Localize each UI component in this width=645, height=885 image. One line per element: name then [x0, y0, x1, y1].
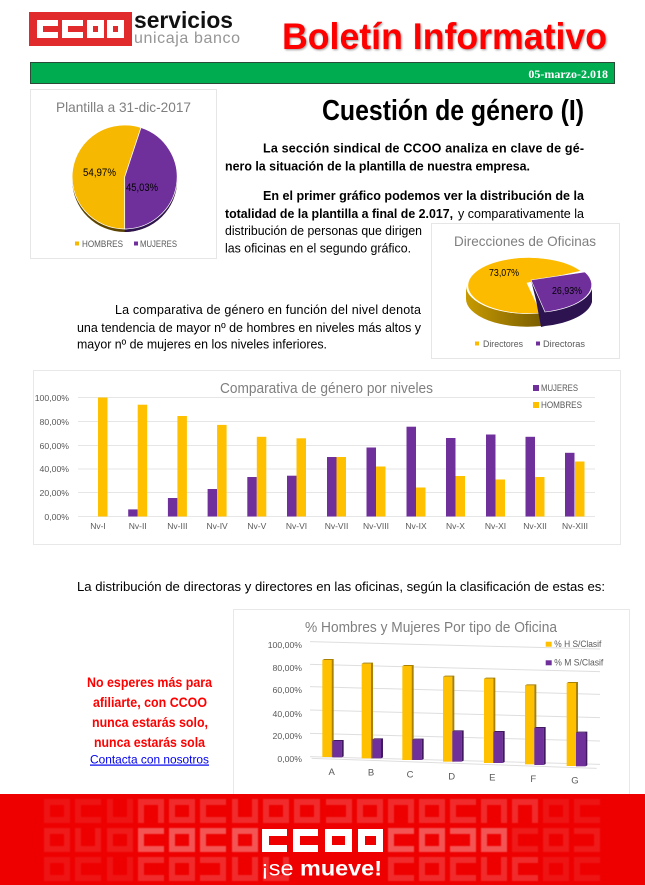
footer banner — [0, 794, 645, 885]
legend — [546, 639, 604, 668]
panel: pie chart Plantilla a 31-dic-2017: 54,97% — [83, 167, 116, 179]
panel: 3D pie chart Direcciones de Oficinas: Direcciones de Oficinas — [454, 233, 596, 249]
axis labels: 20,00% — [273, 731, 302, 741]
title: Boletín Informativo: Boletín Informativo — [282, 16, 607, 57]
category labels: E — [489, 773, 495, 784]
text block: second paragraph: y comparativamente la — [458, 207, 584, 221]
category labels: Nv-XII — [523, 521, 547, 531]
callout: afiliación: No esperes más para — [87, 675, 212, 690]
panel: 3D pie chart Direcciones de Oficinas: Directoras — [543, 339, 586, 349]
axis labels: 80,00% — [273, 663, 302, 673]
callout: afiliación: nunca estarás solo, — [92, 715, 208, 730]
text block: intro paragraph — [225, 142, 584, 174]
text block: comparativa de género — [77, 303, 422, 352]
text block: second paragraph — [225, 189, 585, 256]
axis labels: 40,00% — [40, 464, 69, 474]
panel: 3D pie chart Direcciones de Oficinas: 26,93% — [552, 285, 582, 297]
axis labels: 100,00% — [35, 393, 69, 403]
panel: pie chart Plantilla a 31-dic-2017 — [30, 90, 216, 258]
category labels: Nv-XIII — [562, 521, 588, 531]
category labels: A — [329, 767, 336, 778]
panel: bar chart Comparativa de género por niveles: Comparativa de género por niveles — [220, 381, 433, 397]
category labels: Nv-IV — [206, 521, 228, 531]
bars: mujeres — [128, 427, 574, 516]
category labels — [329, 767, 579, 786]
category labels: Nv-II — [129, 521, 147, 531]
panel: pie chart Plantilla a 31-dic-2017: 45,03% — [126, 182, 158, 194]
category labels: Nv-XI — [485, 521, 506, 531]
text block: second paragraph: En el primer gráfico podemos ver la distribución de la — [263, 189, 585, 203]
category labels: Nv-X — [446, 521, 465, 531]
text block: comparativa de género: La comparativa de género en función del nivel denota — [115, 303, 421, 317]
category labels: G — [571, 775, 579, 786]
logo: CCOO servicios unicaja banco: servicios — [134, 7, 233, 33]
legend: HOMBRES — [541, 400, 582, 410]
category labels: Nv-IX — [405, 521, 427, 531]
axis labels — [268, 640, 302, 764]
callout: afiliación: Contacta con nosotros — [90, 752, 209, 766]
axis labels: 0,00% — [277, 754, 302, 764]
axis labels: 80,00% — [40, 417, 69, 427]
panel: pie chart Plantilla a 31-dic-2017: MUJERES — [140, 239, 177, 249]
axis labels: 60,00% — [273, 685, 302, 695]
logo: CCOO servicios unicaja banco — [29, 7, 240, 47]
panel: bar chart Comparativa de género por niveles — [34, 370, 620, 544]
axis labels: 60,00% — [40, 441, 69, 451]
callout: afiliación: afiliarte, con CCOO — [93, 695, 207, 710]
logo: CCOO white — [266, 832, 380, 848]
bars and gridlines — [310, 642, 600, 768]
panel: 3D bar chart Hombres y Mujeres por tipo de oficina — [234, 610, 630, 800]
heading: Cuestión de género (I): Cuestión de género (I) — [322, 95, 584, 127]
text block: second paragraph: las oficinas en el segundo gráfico. — [225, 242, 411, 256]
slogan: ¡se mueve! — [261, 858, 382, 880]
category labels: Nv-III — [167, 521, 188, 531]
text block: intro paragraph: La sección sindical de CCOO analiza en clave de gé- — [263, 142, 584, 156]
axis labels: 0,00% — [44, 512, 69, 522]
panel: pie chart Plantilla a 31-dic-2017: HOMBRES — [82, 239, 123, 249]
axis labels: 40,00% — [273, 709, 302, 719]
panel: 3D pie chart Direcciones de Oficinas: Directores — [483, 339, 523, 349]
axis labels: 20,00% — [40, 488, 69, 498]
text block: intro paragraph: nero la situación de la plantilla de nuestra empresa. — [225, 160, 530, 174]
category labels: C — [407, 770, 414, 781]
category labels: Nv-VIII — [363, 521, 389, 531]
text block: distribución de directoras: La distribución de directoras y directores en las oficinas, según la clasificación de estas es: — [77, 580, 605, 594]
legend — [533, 383, 582, 410]
date bar — [30, 62, 614, 84]
category labels — [90, 521, 588, 531]
category labels: Nv-V — [247, 521, 267, 531]
category labels: Nv-I — [90, 521, 106, 531]
category labels: F — [530, 774, 536, 785]
axis labels — [35, 393, 69, 522]
callout: afiliación: nunca estarás sola — [94, 735, 205, 750]
legend: % M S/Clasif — [554, 658, 604, 668]
text block: second paragraph: distribución de personas que dirigen — [225, 224, 422, 238]
axis labels: 100,00% — [268, 640, 302, 650]
text block: comparativa de género: una tendencia de mayor nº de hombres en niveles más altos y — [77, 321, 422, 335]
date bar: 05-marzo-2.018 — [528, 67, 608, 81]
bars: hombres — [98, 398, 584, 516]
category labels: B — [368, 768, 374, 779]
panel: pie chart Plantilla a 31-dic-2017: Plantilla a 31-dic-2017 — [56, 99, 191, 115]
panel: 3D pie chart Direcciones de Oficinas — [432, 224, 620, 358]
logo: CCOO servicios unicaja banco: unicaja banco — [134, 30, 240, 47]
category labels: Nv-VI — [286, 521, 307, 531]
legend: MUJERES — [541, 383, 578, 393]
legend: % H S/Clasif — [554, 639, 602, 649]
text block: comparativa de género: mayor nº de mujeres en los niveles inferiores. — [77, 338, 327, 352]
panel: 3D bar chart Hombres y Mujeres por tipo de oficina: % Hombres y Mujeres Por tipo de Oficina — [305, 620, 558, 636]
callout: afiliación — [87, 675, 212, 766]
text block: second paragraph: totalidad de la plantilla a final de 2.017, — [225, 207, 453, 221]
category labels: Nv-VII — [325, 521, 348, 531]
category labels: D — [448, 771, 455, 782]
panel: 3D pie chart Direcciones de Oficinas: 73,07% — [489, 267, 519, 279]
